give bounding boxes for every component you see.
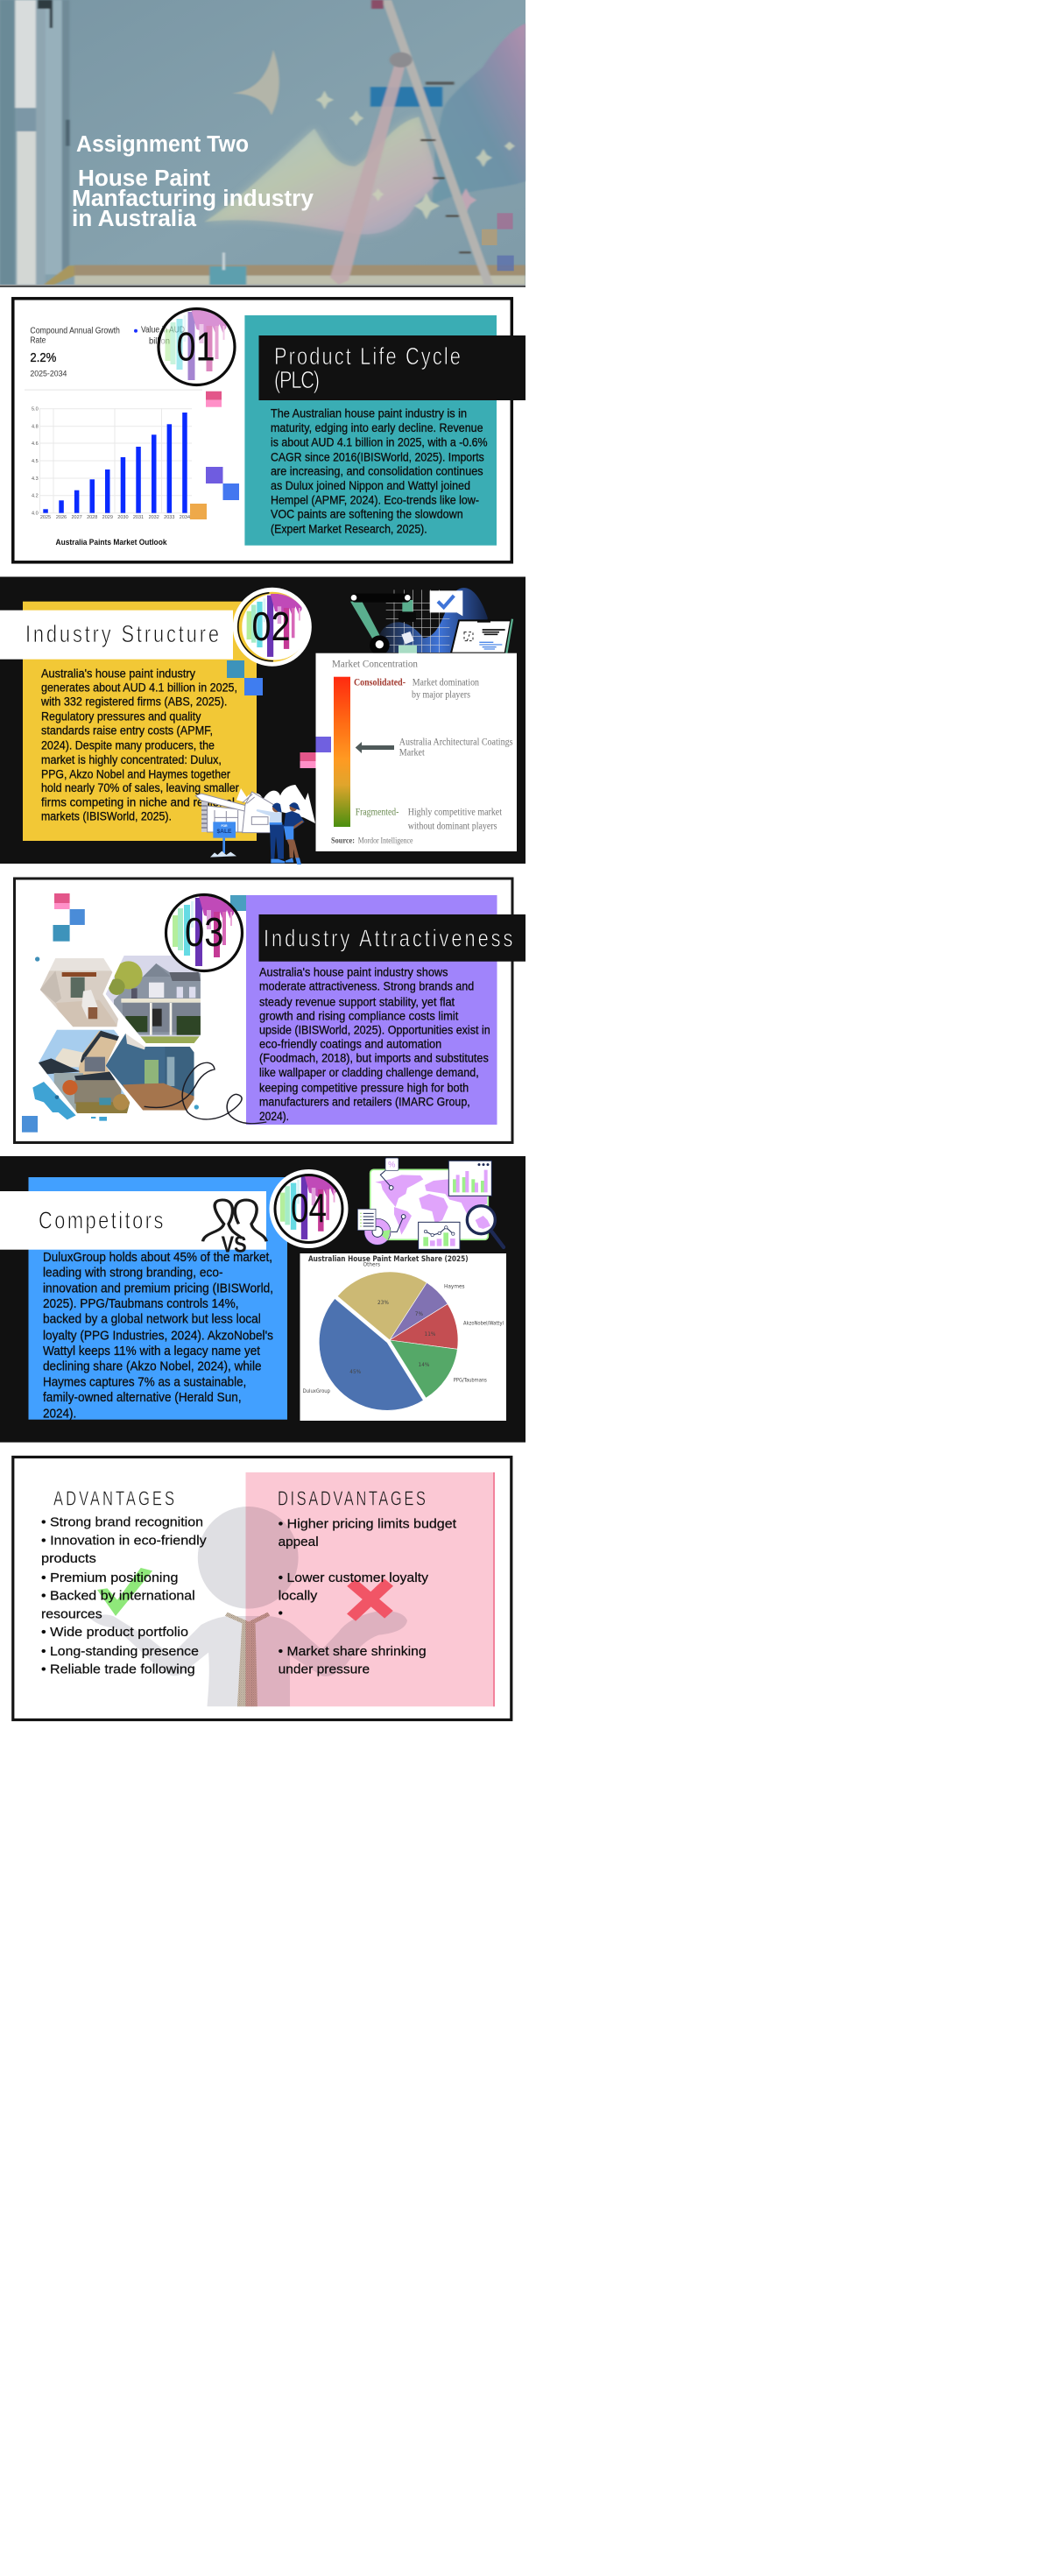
panel: industry attractiveness xyxy=(14,879,526,1142)
panel: market concentration: Highly competitive market xyxy=(408,808,503,818)
body text: Australia's house paint industry shows xyxy=(259,965,448,978)
body text: markets (IBISWorld, 2025). xyxy=(41,810,172,823)
advantages list: resources xyxy=(41,1606,102,1621)
icon: green check xyxy=(97,1568,152,1616)
panel: product life cycle xyxy=(13,299,526,562)
body text: CAGR since 2016(IBISWorld, 2025). Imports xyxy=(271,451,484,464)
illustration: robot arm and checklist xyxy=(350,588,512,655)
disadvantages list: DISADVANTAGES xyxy=(278,1488,426,1510)
number badge 02: 02 xyxy=(252,603,291,649)
bar card xyxy=(448,1161,491,1196)
decorative squares xyxy=(300,737,331,768)
bar chart xyxy=(32,407,192,547)
photo: renovated room xyxy=(38,956,120,1029)
bar chart: 2025 xyxy=(40,515,51,520)
panel: market concentration: Source: xyxy=(331,836,355,845)
chart stats: Value in AUD xyxy=(141,326,185,335)
disadvantages list: • Higher pricing limits budget xyxy=(279,1516,457,1531)
body text: eco-friendly coatings and automation xyxy=(259,1038,441,1051)
advantages list: ADVANTAGES xyxy=(53,1488,174,1510)
percent tag xyxy=(385,1158,399,1170)
panel: industry structure xyxy=(0,576,526,865)
bar chart: 2027 xyxy=(71,515,82,520)
body text: keeping competitive pressure high for both xyxy=(259,1082,469,1095)
pie chart panel: 45% xyxy=(349,1370,362,1375)
title band: Competitors xyxy=(39,1207,163,1234)
photo: blue room xyxy=(105,1032,195,1111)
mural mountain xyxy=(204,116,439,234)
body text: moderate attractiveness. Strong brands and xyxy=(259,980,474,993)
body text: (Expert Market Research, 2025). xyxy=(271,523,427,536)
body text: Haymes captures 7% as a sustainable, xyxy=(43,1375,246,1389)
title band: Industry Structure xyxy=(25,620,219,648)
pie chart panel: 23% xyxy=(377,1301,389,1306)
icon: versus people xyxy=(203,1200,266,1257)
bar chart: 2029 xyxy=(102,515,113,520)
pie chart panel: Australian House Paint Market Share (2025) xyxy=(308,1254,469,1263)
advantages list xyxy=(41,1488,207,1676)
magnifier xyxy=(492,1232,504,1247)
icon: red cross xyxy=(351,1583,389,1618)
panel: market concentration: Market Concentration xyxy=(332,660,418,670)
decorative squares xyxy=(190,392,239,519)
bar chart: 2034 xyxy=(180,515,190,520)
pink panel xyxy=(245,1472,495,1706)
panel: market concentration: Consolidated- xyxy=(354,678,406,688)
pie chart panel: Haymes xyxy=(444,1285,465,1290)
body text xyxy=(259,965,490,1123)
photo: grey house xyxy=(105,955,201,1045)
bar chart: 4.5 xyxy=(32,459,39,464)
person two xyxy=(284,802,305,865)
pie chart panel: AkzoNobel/Wattyl xyxy=(463,1322,504,1327)
mural glow xyxy=(204,116,439,234)
advantages list: • Long-standing presence xyxy=(41,1644,199,1659)
advantages list: • Backed by international xyxy=(41,1589,195,1604)
title bar: Industry Attractiveness xyxy=(264,925,512,952)
body text: like wallpaper or cladding challenge demand, xyxy=(259,1066,479,1079)
mural stars xyxy=(316,90,515,220)
body text: Wattyl keeps 11% with a legacy name yet xyxy=(43,1344,260,1359)
illustration: world map with data cards: % xyxy=(388,1161,395,1169)
hero title: Assignment Two xyxy=(76,132,249,157)
yellow text panel xyxy=(23,602,257,841)
splash xyxy=(32,1082,76,1119)
body text: steady revenue support stability, yet flat xyxy=(259,995,455,1008)
body text: Australia's house paint industry xyxy=(41,667,195,680)
number badge 01: 01 xyxy=(177,324,215,370)
body text: Regulatory pressures and quality xyxy=(41,709,201,723)
panel: competitors xyxy=(0,1156,526,1443)
body text: 2025). PPG/Taubmans controls 14%, xyxy=(43,1297,238,1311)
chart stats: Rate xyxy=(30,336,46,346)
advantages list: • Reliable trade following xyxy=(41,1662,195,1676)
body text: innovation and premium pricing (IBISWorld, xyxy=(43,1281,273,1295)
mural cloud xyxy=(433,24,526,204)
pie chart panel: 7% xyxy=(415,1312,423,1317)
arrow xyxy=(356,742,394,753)
continents xyxy=(375,1175,487,1235)
panel: market concentration: Mordor Intelligence xyxy=(358,836,413,845)
disadvantages list: appeal xyxy=(279,1535,319,1549)
number badge 03 xyxy=(166,895,242,970)
body text: generates about AUD 4.1 billion in 2025, xyxy=(41,681,237,694)
body text: growth and rising compliance costs limit xyxy=(259,1009,459,1022)
body text: loyalty (PPG Industries, 2024). AkzoNobel's xyxy=(43,1329,273,1343)
number badge 01 xyxy=(159,308,235,385)
panel: market concentration: Market domination xyxy=(413,678,479,688)
donut xyxy=(364,1218,391,1245)
pin lines xyxy=(380,1170,404,1232)
disadvantages list: • Market share shrinking xyxy=(279,1644,427,1659)
body text xyxy=(43,1251,273,1422)
pie slices xyxy=(319,1272,458,1410)
body text: family-owned alternative (Herald Sun, xyxy=(43,1391,242,1405)
illustration: house for sale with two people xyxy=(195,785,315,865)
body text: is about AUD 4.1 billion in 2025, with a -0.6% xyxy=(271,435,488,448)
body text: DuluxGroup holds about 45% of the market, xyxy=(43,1251,272,1265)
bar chart: 2033 xyxy=(164,515,174,520)
bar chart: 4.3 xyxy=(32,476,39,482)
window frame xyxy=(0,0,15,285)
background photo: room with mural and ladder xyxy=(0,0,526,285)
body text: backed by a global network but less local xyxy=(43,1313,261,1327)
body text: Hempel (APMF, 2024). Eco-trends like low- xyxy=(271,493,479,506)
panel: market concentration: Market xyxy=(399,748,425,759)
panel: market concentration: Australia Architectural Coatings xyxy=(399,738,513,748)
hero title: House Paint xyxy=(78,166,211,191)
pie chart panel: 11% xyxy=(425,1332,436,1337)
body text: 2024). xyxy=(43,1408,76,1422)
advantages list: • Premium positioning xyxy=(41,1570,179,1585)
icon: versus people: VS xyxy=(222,1232,247,1257)
paint bucket xyxy=(209,266,246,285)
title bar xyxy=(259,335,526,400)
number badge 03: 03 xyxy=(185,909,224,955)
hero title: Manfacturing industry xyxy=(72,187,314,211)
body text: VOC paints are softening the slowdown xyxy=(271,507,463,520)
teal text panel xyxy=(244,315,497,546)
number badge 02 xyxy=(234,589,311,666)
pie chart panel: DuluxGroup xyxy=(303,1389,330,1394)
illustration: world map with data cards xyxy=(357,1158,504,1249)
pie chart panel: PPG/Taubmans xyxy=(454,1379,487,1384)
ladder xyxy=(382,0,493,285)
illustration: house for sale with two people: $ALE xyxy=(216,829,232,835)
body text xyxy=(40,667,239,823)
bar chart: 4.0 xyxy=(32,512,39,517)
body text: 2024). Despite many producers, the xyxy=(41,739,215,752)
panel: market concentration xyxy=(315,653,517,851)
body text: The Australian house paint industry is in xyxy=(271,407,467,420)
photo: cream house xyxy=(38,1027,131,1115)
line card xyxy=(419,1222,460,1249)
body text: as Dulux joined Nippon and Wattyl joined xyxy=(271,479,470,492)
hero banner xyxy=(0,0,526,287)
panel: market concentration: Fragmented- xyxy=(356,808,399,818)
body text: 2024). xyxy=(259,1110,289,1123)
disadvantages list: • xyxy=(279,1606,283,1621)
bar chart: 2032 xyxy=(149,515,159,520)
decorative squares xyxy=(227,660,263,695)
illustration: house for sale with two people: FOR xyxy=(221,824,228,828)
bar chart: 2030 xyxy=(117,515,129,520)
disadvantages list: locally xyxy=(279,1589,318,1604)
advantages list: products xyxy=(41,1551,96,1566)
body text: leading with strong branding, eco- xyxy=(43,1267,223,1281)
panel: advantages and disadvantages xyxy=(13,1457,511,1720)
bar chart: 4.8 xyxy=(32,425,39,430)
mural crescent xyxy=(231,50,279,116)
baseboard and floor xyxy=(74,265,526,276)
chart stats xyxy=(25,326,202,391)
figure: 3D man with tie xyxy=(88,1507,407,1706)
body text: manufacturers and retailers (IMARC Group, xyxy=(259,1096,470,1109)
panel: market concentration: without dominant players xyxy=(408,822,497,832)
chart stats: 2025-2034 xyxy=(30,370,67,378)
panel: market concentration: by major players xyxy=(412,690,470,701)
faded squares xyxy=(497,213,513,229)
number badge 04 xyxy=(270,1170,347,1247)
disadvantages list: • Lower customer loyalty xyxy=(279,1570,428,1585)
bar chart: 4.6 xyxy=(32,441,39,447)
advantages list: • Innovation in eco-friendly xyxy=(41,1533,207,1548)
body text: firms competing in niche and regional xyxy=(41,795,235,808)
bar chart: 2031 xyxy=(133,515,144,520)
title band xyxy=(0,1191,266,1250)
bar chart: 2028 xyxy=(87,515,97,520)
bar chart: 2026 xyxy=(56,515,67,520)
title bar: (PLC) xyxy=(274,366,320,394)
bar chart: Australia Paints Market Outlook xyxy=(56,538,167,547)
hero title: in Australia xyxy=(72,207,197,231)
body text xyxy=(271,407,488,536)
pie chart panel xyxy=(300,1253,506,1421)
blue tray xyxy=(370,87,442,107)
title bar: Product Life Cycle xyxy=(274,342,461,371)
blue text panel xyxy=(28,1177,287,1420)
body text: are increasing, and consolidation continues xyxy=(271,465,483,478)
hero title xyxy=(72,132,314,231)
body text: declining share (Akzo Nobel, 2024), while xyxy=(43,1360,261,1374)
title bar xyxy=(259,914,526,962)
squiggle xyxy=(145,1062,266,1124)
person one xyxy=(257,803,285,863)
body text: standards raise entry costs (APMF, xyxy=(41,723,213,737)
chart stats: billion xyxy=(149,337,170,347)
body text: PPG, Akzo Nobel and Haymes together xyxy=(41,767,230,780)
pie chart panel: 14% xyxy=(419,1363,430,1368)
chart stats: Compound Annual Growth xyxy=(30,327,120,336)
advantages list: • Wide product portfolio xyxy=(41,1625,188,1640)
purple text panel xyxy=(246,895,497,1125)
body text: hold nearly 70% of sales, leaving smaller xyxy=(41,781,239,794)
title band xyxy=(0,610,233,660)
body text: with 332 registered firms (ABS, 2025). xyxy=(40,695,227,709)
pie chart panel: Others xyxy=(363,1262,380,1267)
advantages list: • Strong brand recognition xyxy=(41,1515,203,1530)
document xyxy=(357,1209,376,1231)
disadvantages list xyxy=(278,1488,457,1676)
bar chart: 5.0 xyxy=(32,407,39,413)
body text: maturity, edging into early decline. Revenue xyxy=(271,421,483,434)
body text: upside (IBISWorld, 2025). Opportunities exist in xyxy=(259,1023,490,1036)
disadvantages list: under pressure xyxy=(279,1662,370,1676)
bar chart: 4.2 xyxy=(32,494,39,499)
chart stats: 2.2% xyxy=(30,350,56,365)
body text: market is highly concentrated: Dulux, xyxy=(41,753,222,766)
number badge 04: 04 xyxy=(291,1185,327,1231)
decorative squares xyxy=(22,893,246,1133)
photo collage xyxy=(32,955,201,1121)
body text: (Foodmach, 2018), but imports and substitutes xyxy=(259,1052,489,1065)
